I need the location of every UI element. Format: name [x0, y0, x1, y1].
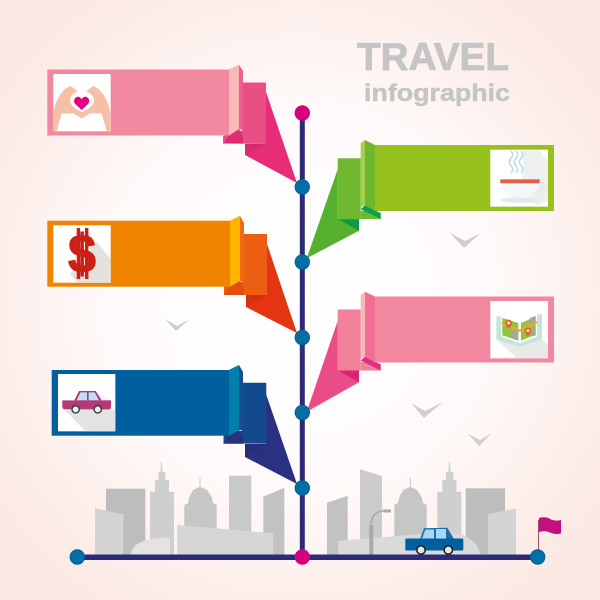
icon: hands forming a heart [53, 74, 111, 131]
street lamp [369, 510, 391, 555]
icon: dollar sign [53, 224, 111, 284]
icon: pink car [58, 374, 115, 431]
skyline: right city [327, 462, 516, 554]
timeline: vertical and horizontal line [77, 113, 538, 560]
timeline nodes [70, 106, 545, 564]
icon: blue car on road [405, 528, 463, 554]
birds [165, 233, 492, 446]
title: infographic [364, 80, 510, 107]
panel: hot drink (green, right top) [307, 140, 554, 258]
icon: steaming cup [490, 150, 548, 207]
title [357, 36, 510, 107]
panel: heart hands (pink, left top) [47, 65, 297, 183]
panel: dollar (orange, left middle) [47, 216, 297, 333]
skyline: left city [95, 462, 284, 555]
title: TRAVEL [357, 36, 509, 79]
panel: map (pink, right middle) [307, 292, 554, 412]
icon: open map [490, 301, 548, 358]
icon: finish flag [538, 517, 561, 552]
panel: car (blue, left bottom) [52, 365, 297, 484]
icon: dollar sign: $ [68, 224, 96, 284]
